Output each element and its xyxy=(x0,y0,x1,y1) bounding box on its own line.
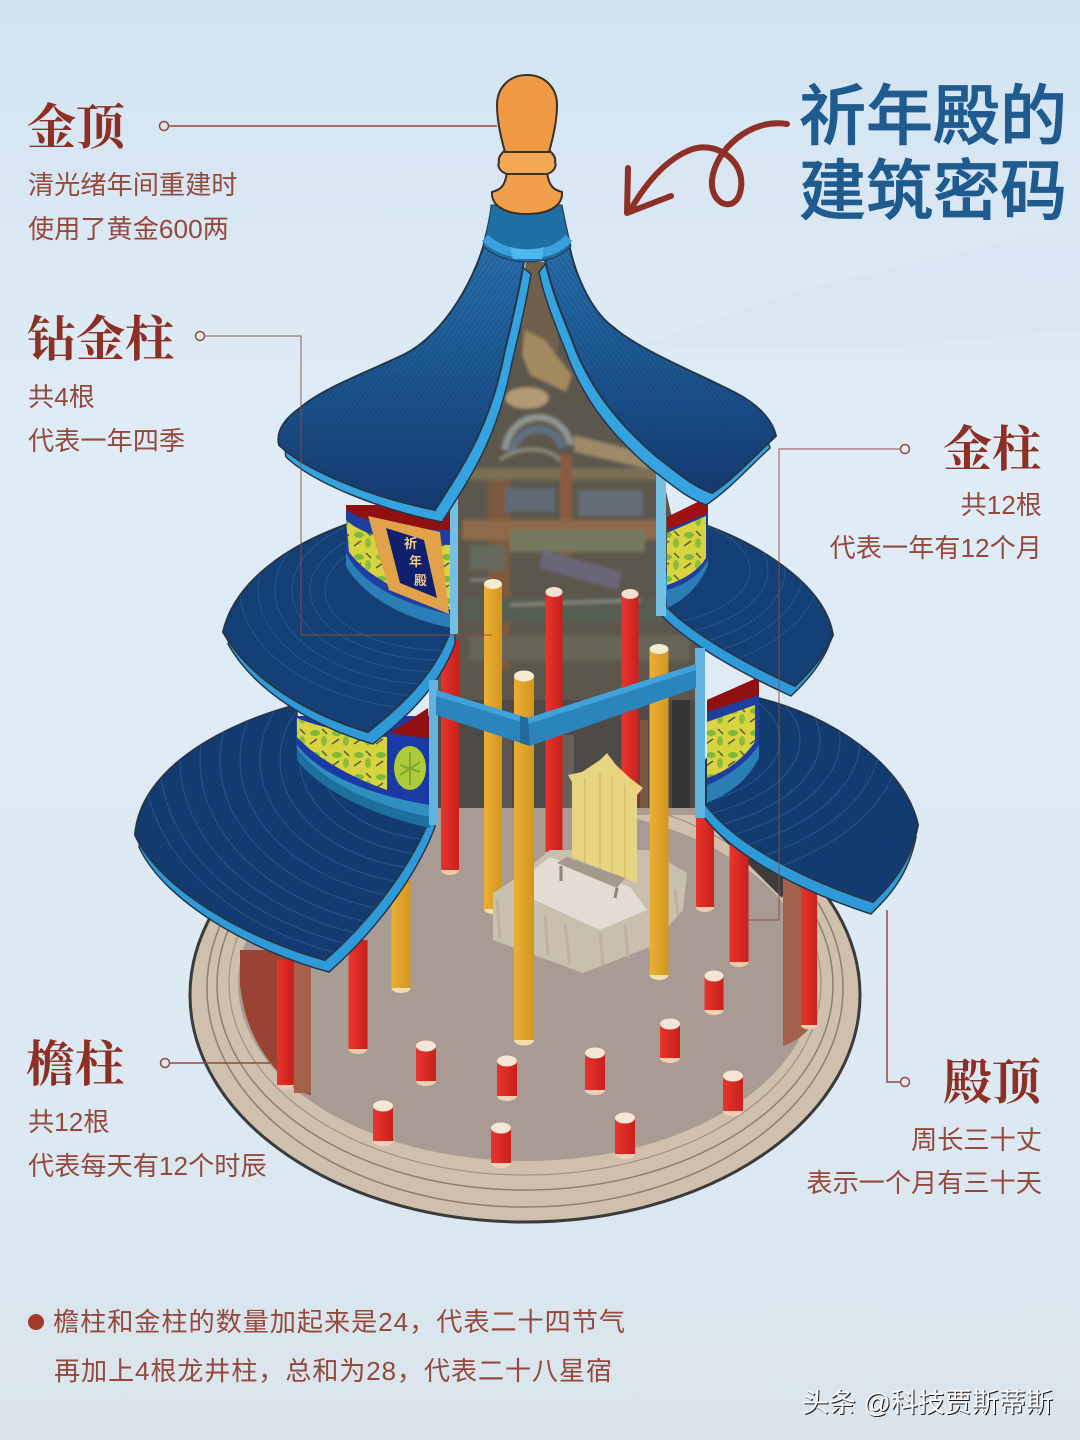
plaque: 祈年殿 xyxy=(368,516,449,614)
roof: lower right xyxy=(704,697,919,915)
roof: upper right xyxy=(539,232,776,505)
top roof tier xyxy=(278,205,776,522)
label: 金柱 xyxy=(745,422,1042,920)
label: 檐柱 xyxy=(26,1037,280,1181)
label: 殿顶: 殿顶 xyxy=(943,1055,1043,1110)
title: 祈年殿的建筑密码: 祈年殿的 xyxy=(799,79,1067,153)
icon: golden finial xyxy=(492,75,562,214)
short column stumps xyxy=(373,970,743,1168)
label: 檐柱: 代表每天有12个时辰 xyxy=(28,1151,267,1181)
label: 金顶: 使用了黄金600两 xyxy=(28,214,229,244)
plaque: 祈年殿: 年 xyxy=(409,554,422,569)
roof: middle right xyxy=(662,525,834,697)
walls of the hall xyxy=(240,775,808,1095)
roof collar xyxy=(483,205,571,262)
roof: middle left xyxy=(222,524,456,745)
label: 檐柱: 共12根 xyxy=(28,1107,110,1137)
cutaway posts and cross beam xyxy=(429,458,705,825)
bottom note: 再加上4根龙井柱，总和为28，代表二十八星宿 xyxy=(54,1356,612,1386)
plaque: 祈年殿: 殿 xyxy=(414,573,427,588)
label: 金顶: 金顶 xyxy=(27,100,127,155)
upper drum frieze xyxy=(346,497,708,628)
label: 殿顶 xyxy=(806,910,1043,1198)
roof: upper left xyxy=(278,232,531,522)
base platform and floor xyxy=(190,768,860,1222)
label: 金柱: 金柱 xyxy=(943,422,1041,477)
throne and platform xyxy=(493,753,687,973)
label: 殿顶: 表示一个月有三十天 xyxy=(806,1168,1042,1198)
watermark: 头条 @科技贾斯蒂斯 xyxy=(802,1388,1053,1418)
title: 祈年殿的建筑密码: 建筑密码 xyxy=(799,154,1067,228)
label: 钻金柱: 代表一年四季 xyxy=(28,426,185,456)
lower drum frieze xyxy=(296,677,759,828)
title: 祈年殿的建筑密码 xyxy=(799,79,1067,228)
interior: timber framing seen through cutaway xyxy=(430,255,710,820)
label: 钻金柱 xyxy=(27,312,492,635)
bottom roof tier xyxy=(135,554,918,972)
label: 金柱: 代表一年有12个月 xyxy=(830,533,1042,563)
label: 钻金柱: 钻金柱 xyxy=(27,312,174,367)
rear columns: 龙井柱 and 金柱 behind the throne xyxy=(441,579,638,914)
middle roof tier xyxy=(223,465,833,744)
bottom note xyxy=(28,1307,625,1386)
label: 金柱: 共12根 xyxy=(960,490,1042,520)
label: 钻金柱: 共4根 xyxy=(28,382,95,412)
label: 檐柱: 檐柱 xyxy=(26,1037,124,1092)
plaque: 祈年殿: 祈 xyxy=(404,536,417,551)
label: 金顶: 清光绪年间重建时 xyxy=(28,170,238,200)
label: 金顶 xyxy=(27,100,497,244)
bottom note: 檐柱和金柱的数量加起来是24，代表二十四节气 xyxy=(53,1307,625,1337)
roof: lower left xyxy=(134,706,436,973)
arrow: curl pointing to the roof xyxy=(627,123,787,213)
label: 殿顶: 周长三十丈 xyxy=(911,1125,1042,1155)
columns: 金柱 and 檐柱 xyxy=(276,644,817,1090)
